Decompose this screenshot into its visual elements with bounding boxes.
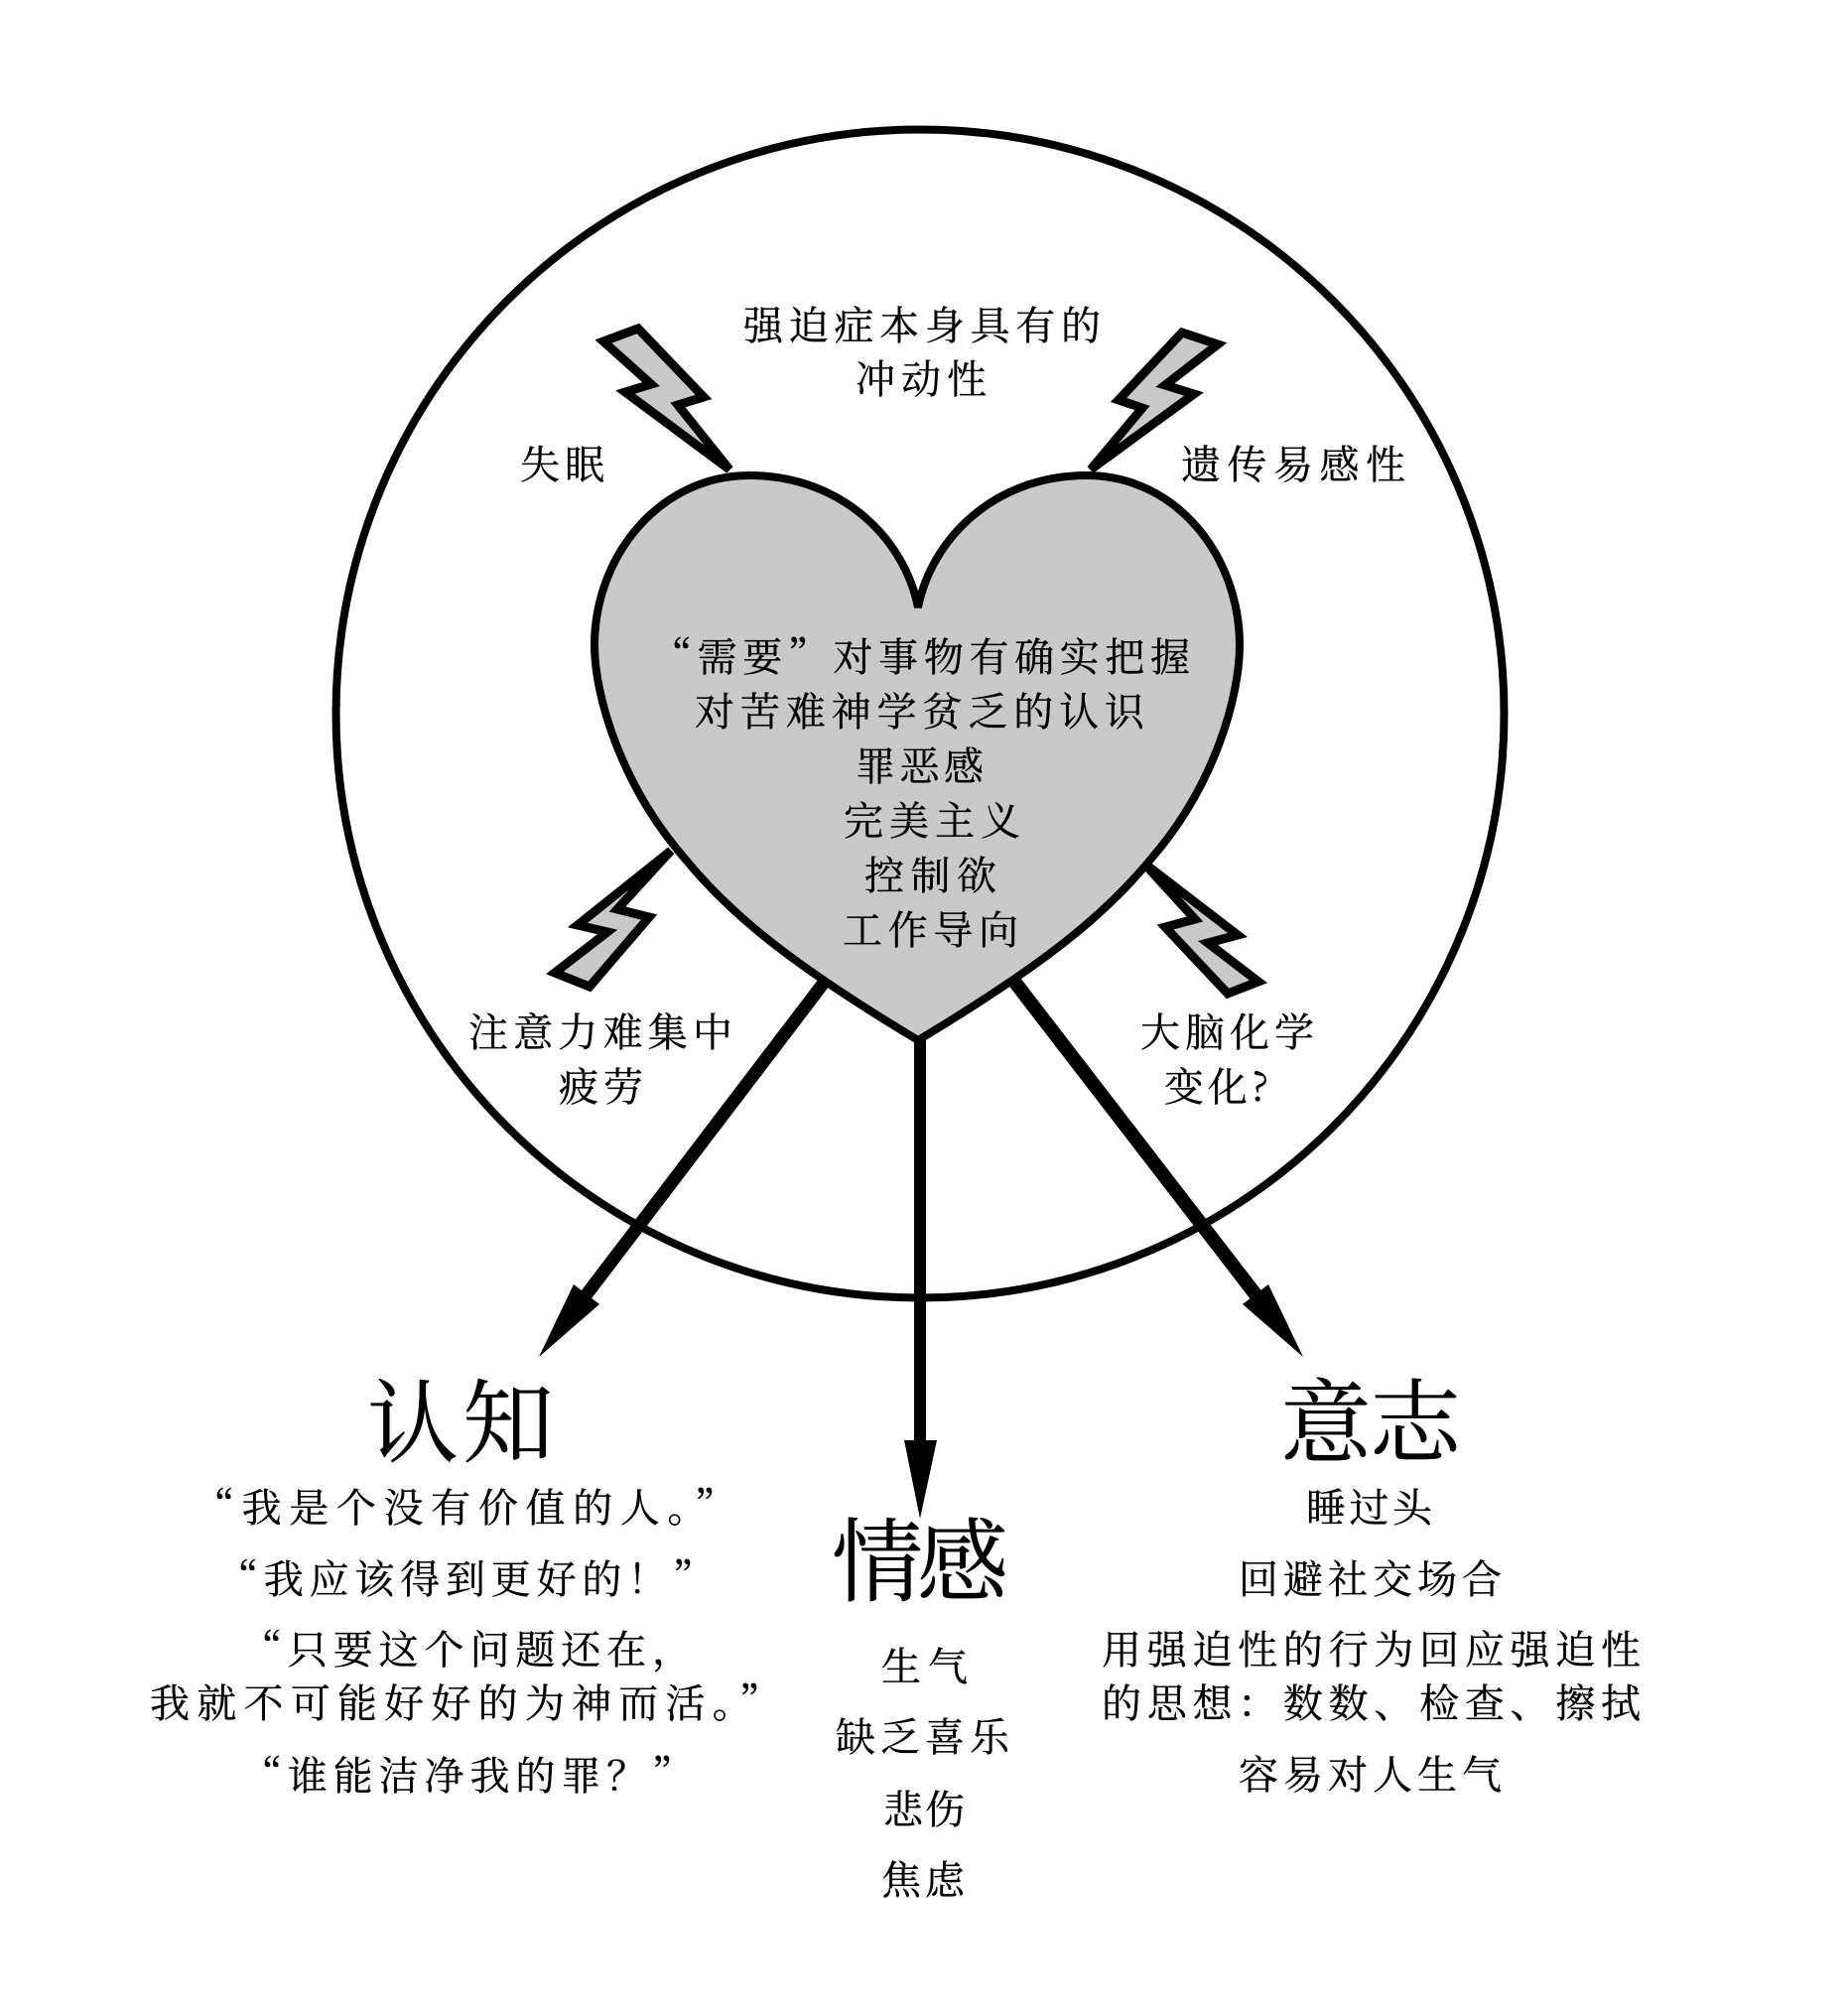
text block: cognition quotes: “我是个没有价值的人。” bbox=[195, 1477, 734, 1534]
label: poor concentration, fatigue: 疲劳 bbox=[559, 1056, 643, 1113]
text block: will items: 回避社交场合 bbox=[1239, 1548, 1502, 1605]
text block: will items: 的思想：数数、检查、擦拭 bbox=[1102, 1673, 1641, 1729]
text block: emotion items: 缺乏喜乐 bbox=[836, 1706, 1010, 1763]
heading: will: 意志 bbox=[1280, 1351, 1463, 1482]
text block: will items bbox=[1102, 1477, 1641, 1801]
heading: cognition: 认知 bbox=[367, 1351, 554, 1482]
heart text: 对苦难神学贫乏的认识 bbox=[695, 681, 1145, 737]
text block: will items: 睡过头 bbox=[1306, 1477, 1433, 1534]
label: brain chemistry changes bbox=[1140, 1002, 1314, 1113]
heading: emotion: 情感 bbox=[832, 1490, 1008, 1621]
heart text: 工作导向 bbox=[843, 899, 1018, 956]
text block: emotion items: 生气 bbox=[881, 1636, 968, 1692]
text block: cognition quotes: “谁能洁净我的罪？” bbox=[242, 1745, 692, 1802]
arrow: to will bbox=[1015, 983, 1303, 1357]
text block: will items: 容易对人生气 bbox=[1239, 1744, 1502, 1801]
text block: cognition quotes: “只要这个问题还在， bbox=[242, 1619, 692, 1675]
text block: emotion items: 悲伤 bbox=[883, 1779, 965, 1835]
text block: cognition quotes bbox=[150, 1477, 779, 1802]
heart text: 罪恶感 bbox=[856, 736, 984, 792]
label: poor concentration, fatigue bbox=[468, 1002, 732, 1113]
text block: cognition quotes: “我应该得到更好的！” bbox=[218, 1548, 713, 1605]
label: insomnia: 失眠 bbox=[520, 434, 604, 490]
heart bbox=[594, 475, 1240, 1040]
icon: lightning bolt lower right bbox=[1143, 863, 1258, 994]
label: inherent impulsivity of OCD: 冲动性 bbox=[856, 348, 987, 405]
label: inherent impulsivity of OCD bbox=[743, 295, 1101, 405]
arrow: to cognition bbox=[539, 983, 824, 1357]
label: genetic susceptibility: 遗传易感性 bbox=[1181, 434, 1405, 490]
text block: emotion items: 焦虑 bbox=[881, 1849, 966, 1906]
label: brain chemistry changes: 大脑化学 bbox=[1140, 1002, 1314, 1058]
arrow: to emotion bbox=[904, 1037, 937, 1519]
heart text: 控制欲 bbox=[864, 845, 996, 901]
text block: will items: 用强迫性的行为回应强迫性 bbox=[1102, 1619, 1641, 1675]
icon: lightning bolt lower left bbox=[555, 851, 671, 987]
icon: lightning bolt top left bbox=[603, 329, 729, 469]
outer circle bbox=[335, 129, 1505, 1298]
text block: emotion items bbox=[836, 1636, 1010, 1906]
label: brain chemistry changes: 变化? bbox=[1164, 1056, 1268, 1113]
heart text: 完美主义 bbox=[844, 790, 1020, 847]
label: poor concentration, fatigue: 注意力难集中 bbox=[468, 1002, 732, 1058]
heart text: “需要”对事物有确实把握 bbox=[652, 626, 1190, 683]
icon: lightning bolt top right bbox=[1091, 333, 1218, 469]
label: inherent impulsivity of OCD: 强迫症本身具有的 bbox=[743, 295, 1101, 351]
heart text bbox=[652, 626, 1190, 956]
text block: cognition quotes: 我就不可能好好的为神而活。” bbox=[150, 1673, 779, 1729]
